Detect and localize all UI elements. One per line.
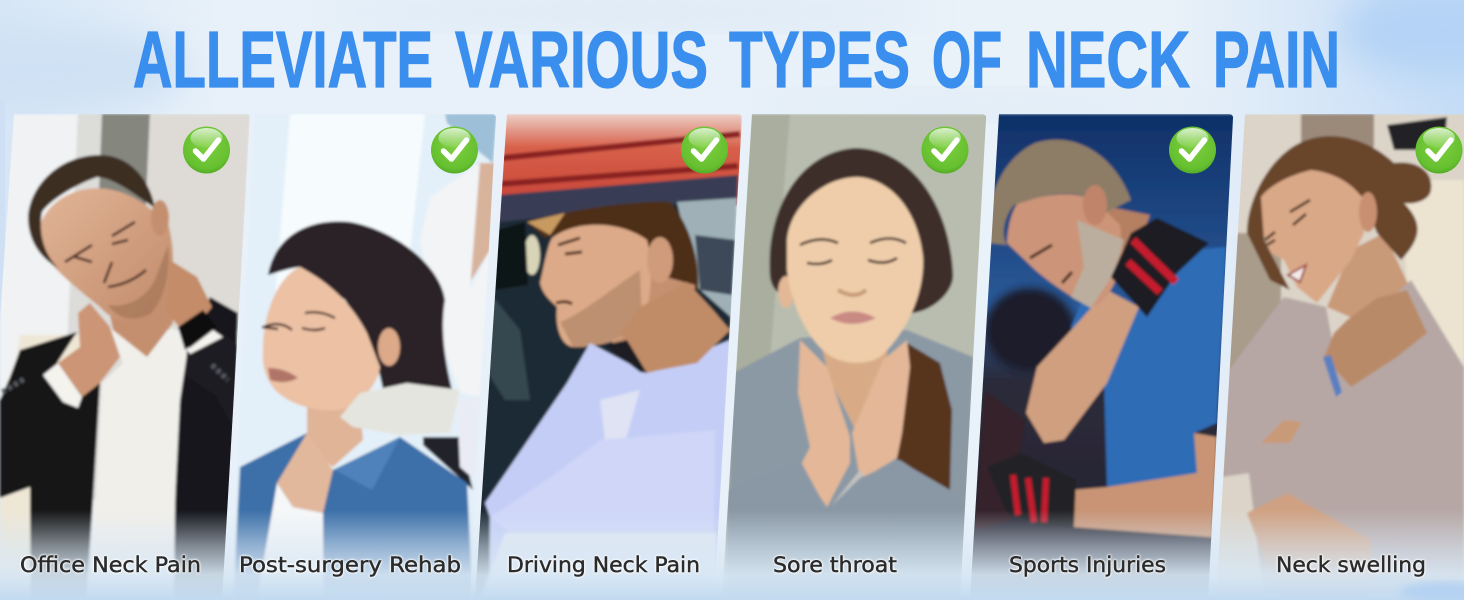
label: post-surgery rehab: Post-surgery Rehab xyxy=(239,553,461,577)
left hand xyxy=(798,340,850,507)
throat hand xyxy=(1324,290,1427,387)
hair xyxy=(988,140,1131,245)
title: ALLEVIATE xyxy=(133,15,433,104)
mouth xyxy=(268,368,298,382)
facial features xyxy=(65,222,146,287)
label: driving neck pain: Driving Neck Pain xyxy=(507,553,700,577)
seat dark xyxy=(495,222,528,290)
label: sore throat: Sore throat xyxy=(773,553,897,577)
neck xyxy=(110,280,173,357)
mask xyxy=(445,114,497,163)
ponytail xyxy=(893,343,952,490)
features xyxy=(800,238,906,264)
panel: sports injuries photo xyxy=(965,114,1237,600)
title xyxy=(133,15,1340,104)
panel: office neck pain photo xyxy=(0,114,250,600)
dark equipment xyxy=(985,288,1075,372)
lower arm xyxy=(1071,433,1217,537)
lower glove xyxy=(987,453,1076,528)
ear xyxy=(1359,192,1377,232)
doctor coat xyxy=(420,163,490,397)
watch xyxy=(1323,355,1342,397)
features xyxy=(1030,245,1072,283)
hand left xyxy=(58,303,120,397)
stubble xyxy=(108,245,169,319)
hair xyxy=(770,148,953,313)
ear xyxy=(1083,185,1107,225)
ear xyxy=(151,200,169,236)
face xyxy=(1261,170,1364,303)
nose shadow xyxy=(838,290,866,295)
title: TYPES xyxy=(729,15,910,104)
neck xyxy=(820,340,887,433)
gym background xyxy=(965,114,1237,600)
hand right xyxy=(167,260,212,330)
dark gap xyxy=(423,437,473,490)
sweater sleeve xyxy=(727,460,960,600)
panel: post-surgery rehab photo xyxy=(225,114,500,600)
stubble xyxy=(560,270,642,347)
face xyxy=(263,267,380,410)
features xyxy=(556,238,582,304)
jacket right xyxy=(173,297,238,600)
upper arm xyxy=(1026,290,1139,443)
lower shirt pale xyxy=(480,533,716,600)
hair xyxy=(527,202,698,290)
hair xyxy=(268,221,452,390)
shirt xyxy=(95,328,184,516)
shirt xyxy=(1222,280,1464,600)
check badges xyxy=(183,126,1462,174)
car interior xyxy=(470,198,737,600)
panel: sore throat photo xyxy=(720,114,990,600)
title: PAIN xyxy=(1213,15,1340,104)
face xyxy=(1007,194,1124,307)
head xyxy=(39,188,173,321)
mouth xyxy=(1288,265,1306,282)
sweater xyxy=(727,330,973,600)
hair xyxy=(28,155,155,268)
title: OF xyxy=(932,15,1002,104)
doctor skin xyxy=(470,162,494,281)
doctor sleeve xyxy=(456,435,472,476)
bottom fog xyxy=(0,510,1464,600)
features xyxy=(1265,200,1310,245)
room background xyxy=(1215,114,1464,600)
ear xyxy=(378,328,400,366)
arm gap skin xyxy=(1261,420,1302,443)
watch xyxy=(178,310,217,350)
upper glove straps xyxy=(1128,240,1176,292)
label: neck swelling: Neck swelling xyxy=(1276,553,1426,577)
window frame xyxy=(498,175,738,222)
steering wheel xyxy=(486,293,530,400)
neck xyxy=(1100,205,1150,280)
shirt xyxy=(485,340,730,600)
cuff right xyxy=(187,330,223,354)
mouth xyxy=(830,312,876,324)
beard xyxy=(1071,220,1124,308)
neck xyxy=(1327,233,1411,330)
right hand xyxy=(852,340,910,480)
panel: neck swelling photo xyxy=(1215,114,1464,600)
white tee xyxy=(260,482,326,586)
jacket left xyxy=(0,332,100,600)
undershirt xyxy=(832,470,868,525)
shirt xyxy=(1071,247,1226,487)
lower hand xyxy=(1247,493,1371,600)
title: NECK xyxy=(1026,15,1190,104)
hair xyxy=(1247,136,1431,290)
bright clinic background xyxy=(236,114,474,556)
cuff left xyxy=(43,363,82,408)
neck xyxy=(610,270,695,350)
chest skin xyxy=(277,433,333,513)
wall background xyxy=(720,114,990,594)
window light xyxy=(524,235,540,275)
label: office neck pain: Office Neck Pain xyxy=(20,553,201,577)
hand xyxy=(620,282,730,373)
title: VARIOUS xyxy=(455,15,708,104)
neck xyxy=(307,403,363,467)
face xyxy=(540,225,651,347)
facial features xyxy=(262,312,335,330)
ears xyxy=(778,276,794,308)
roof stripes xyxy=(500,134,740,184)
ear xyxy=(647,237,673,283)
office background xyxy=(0,114,250,600)
label: sports injuries: Sports Injuries xyxy=(1009,553,1166,577)
panel: driving neck pain photo xyxy=(470,114,742,600)
denim shirt xyxy=(233,433,473,600)
outside view xyxy=(677,198,737,318)
glove xyxy=(340,383,460,435)
watch xyxy=(605,340,647,373)
upper glove xyxy=(1111,218,1209,317)
lower glove straps xyxy=(1013,475,1046,522)
car roof xyxy=(500,114,742,223)
face xyxy=(787,177,923,363)
forearm sleeve right xyxy=(186,337,237,395)
collar xyxy=(337,440,398,490)
buttons xyxy=(2,365,228,392)
